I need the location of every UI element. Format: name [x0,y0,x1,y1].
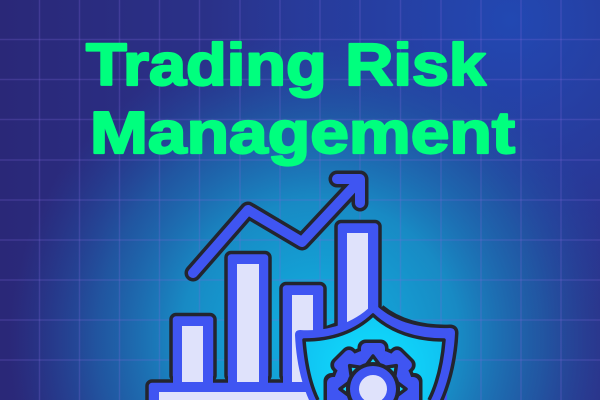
icon: bar 2 [226,252,270,386]
icon: chart base [147,381,447,400]
icon: gear [324,340,422,400]
icon: bar 4 [336,222,380,342]
title: Management [90,100,515,166]
icon: rising arrow [193,179,360,273]
title: Trading Risk [86,32,486,98]
icon: bar 1 [171,314,215,386]
icon: bar 3 [281,284,325,386]
title [86,32,515,166]
icon: shield [295,303,455,400]
